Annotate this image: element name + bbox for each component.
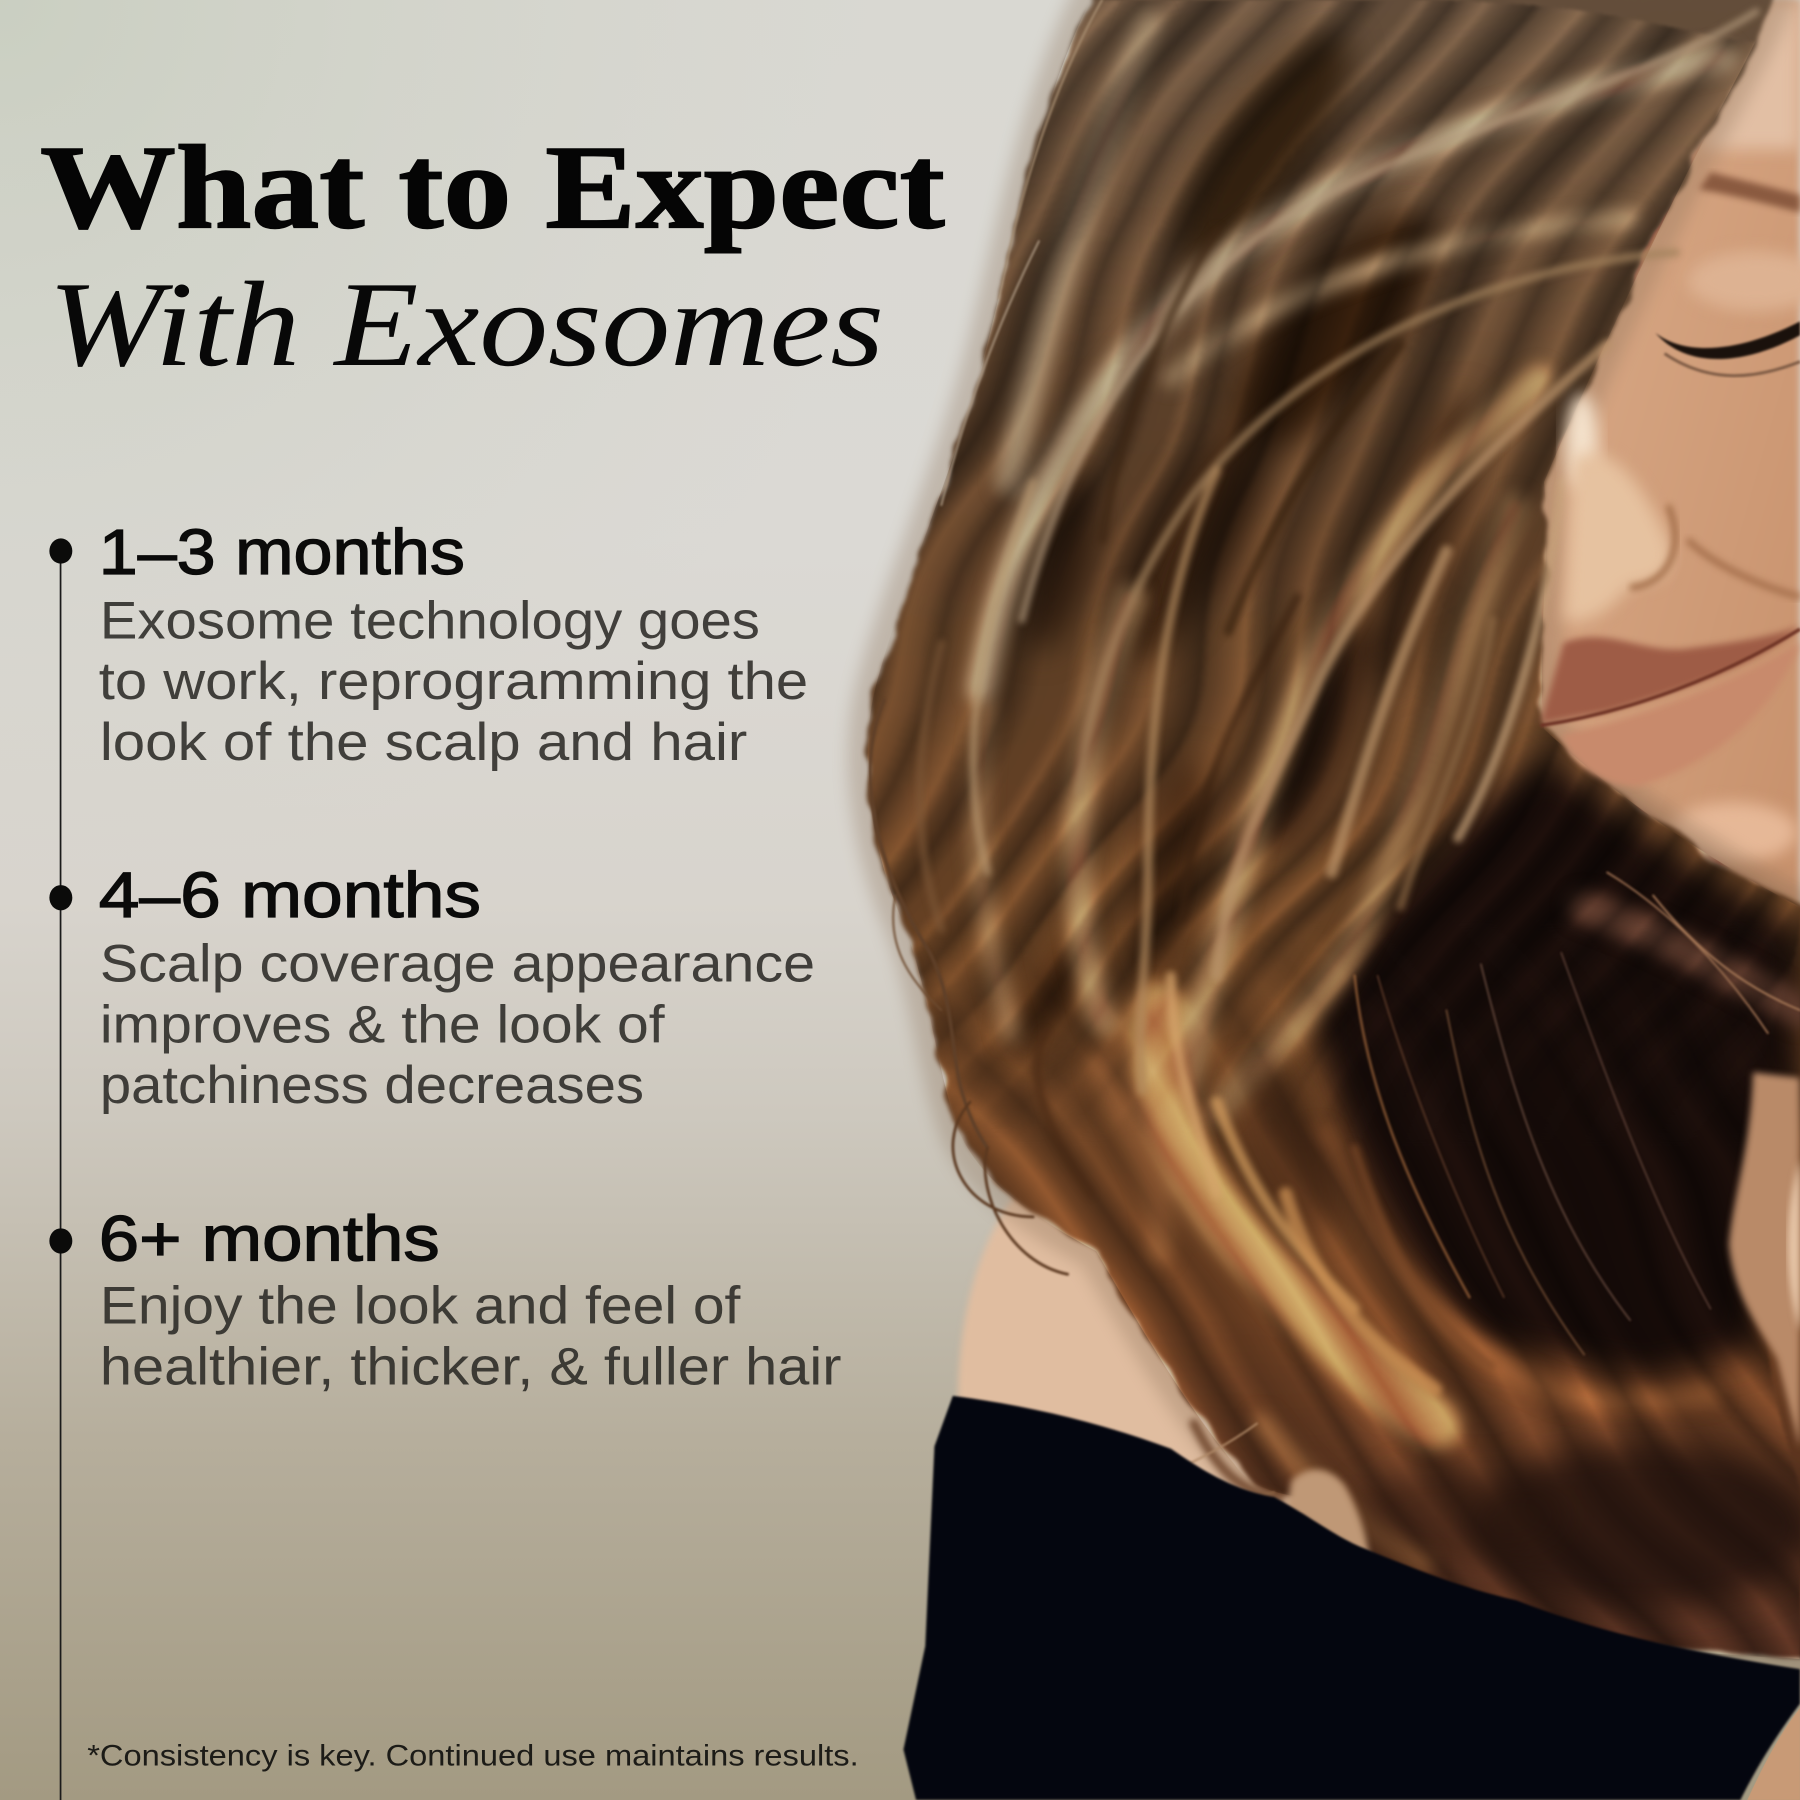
fine hair strands bbox=[920, 11, 1756, 1498]
face and neck skin bbox=[1515, 0, 1800, 999]
lower right skin bbox=[1747, 1708, 1800, 1800]
nose shadow bbox=[1630, 505, 1675, 588]
nose highlight bbox=[1566, 394, 1598, 490]
eyelid shading bbox=[1688, 251, 1800, 311]
step: 6+ months: healthier, thicker, & fuller hair bbox=[100, 1337, 841, 1396]
hair fringe bbox=[868, 0, 1800, 1659]
title line 1: What to Expect bbox=[40, 121, 945, 253]
timeline bbox=[49, 538, 72, 1800]
black top bbox=[903, 1396, 1800, 1800]
neck skin bbox=[1729, 1072, 1800, 1449]
step: 4–6 months bbox=[99, 859, 815, 1115]
eyebrow bbox=[1699, 172, 1800, 212]
lip line bbox=[1541, 629, 1800, 726]
upper lip bbox=[1541, 626, 1800, 723]
step: 4–6 months: patchiness decreases bbox=[100, 1056, 644, 1115]
shoulder skin bbox=[958, 1148, 1412, 1561]
soft hair strands bbox=[978, 23, 1800, 1561]
face details bbox=[1541, 172, 1800, 786]
step: 1–3 months: Exosome technology goes bbox=[100, 591, 760, 650]
step: 1–3 months: to work, reprogramming the bbox=[99, 652, 808, 711]
hair mass bbox=[868, 0, 1800, 1659]
dark hair underlayer bbox=[1004, 11, 1800, 1378]
footnote: *Consistency is key. Continued use maintains results. bbox=[87, 1740, 859, 1773]
lower lip bbox=[1561, 643, 1800, 786]
forehead light bbox=[1699, 0, 1800, 149]
step: 1–3 months: look of the scalp and hair bbox=[100, 713, 747, 772]
step: 4–6 months: Scalp coverage appearance bbox=[100, 935, 815, 994]
cheek light bbox=[1669, 802, 1798, 862]
flyaway wisps bbox=[870, 0, 1800, 1524]
streak texture: lower hair bbox=[922, 964, 1800, 1659]
step: 6+ months: 6+ months bbox=[99, 1202, 440, 1274]
photo: woman with flowing hair bbox=[804, 0, 1800, 1800]
title line 2: With Exosomes bbox=[48, 258, 884, 392]
lower hair shadow bbox=[1216, 1050, 1800, 1609]
title bbox=[40, 121, 945, 392]
step: 1–3 months: 1–3 months bbox=[99, 516, 465, 588]
step: 4–6 months: improves & the look of bbox=[100, 995, 665, 1054]
collarbone skin bbox=[1286, 1470, 1368, 1555]
step: 6+ months: Enjoy the look and feel of bbox=[100, 1277, 741, 1336]
step: 6+ months bbox=[99, 1202, 841, 1396]
step: 4–6 months: 4–6 months bbox=[99, 859, 481, 931]
closed eye lashes bbox=[1655, 321, 1800, 359]
streak texture: upper hair bbox=[868, 0, 1799, 1104]
step: 1–3 months bbox=[99, 516, 808, 772]
